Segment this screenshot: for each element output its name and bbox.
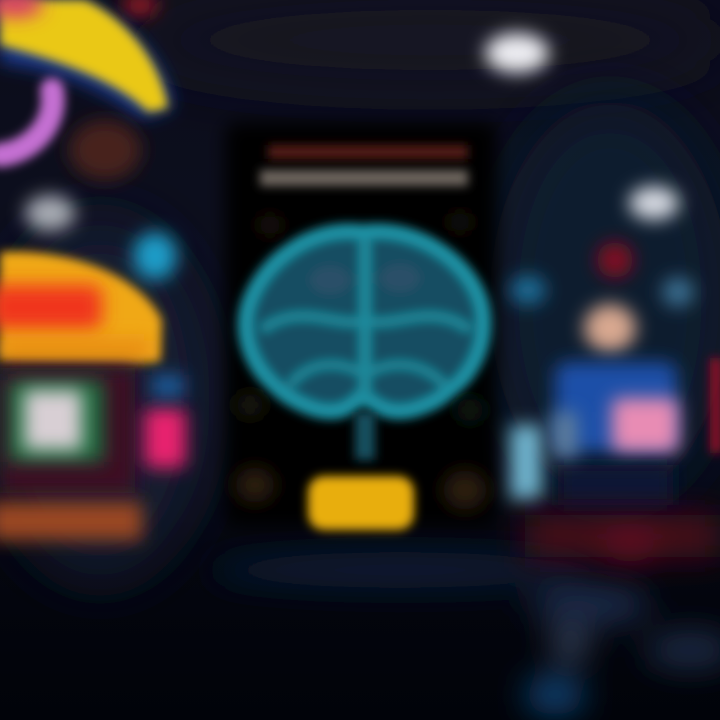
dark red floor glow bbox=[525, 515, 720, 563]
icon: teal brain bbox=[245, 231, 484, 412]
orange lower sign bbox=[0, 502, 142, 540]
brown sign blob bbox=[69, 120, 141, 180]
ceiling light: top bbox=[485, 33, 549, 73]
heading: red title bbox=[268, 145, 468, 159]
ceiling light: right bbox=[629, 186, 679, 220]
icon: brain stem bbox=[355, 412, 375, 460]
red edge sign bbox=[710, 358, 720, 453]
white lamp left bbox=[25, 195, 75, 231]
bottom floor reflection bbox=[210, 552, 720, 715]
orange neon sign bbox=[0, 252, 162, 362]
pale blue panel bbox=[510, 425, 542, 500]
blue lamp left bbox=[510, 275, 546, 305]
cyan lamp bbox=[133, 232, 177, 280]
yellow awning top-left bbox=[0, 0, 172, 118]
figure head bbox=[584, 304, 636, 352]
figure pink highlight bbox=[612, 398, 678, 452]
right scene figure bbox=[510, 242, 720, 563]
center phone panel bbox=[225, 122, 497, 530]
button: yellow bbox=[308, 476, 414, 530]
heading: pale subtitle bbox=[260, 170, 468, 186]
figure dark lower bbox=[558, 465, 673, 505]
blue neon stripe bbox=[152, 375, 184, 397]
top red accent bbox=[122, 0, 158, 15]
figure body blue bbox=[555, 362, 677, 452]
blue lamp right bbox=[662, 277, 694, 307]
green framed poster bbox=[8, 380, 104, 462]
maroon storefront bbox=[0, 368, 135, 493]
red lamp bbox=[597, 242, 633, 278]
pink neon panel bbox=[144, 408, 186, 468]
side marks in panel bbox=[235, 212, 487, 510]
purple neon arc bbox=[0, 90, 53, 155]
grey blue panel bbox=[553, 412, 577, 458]
